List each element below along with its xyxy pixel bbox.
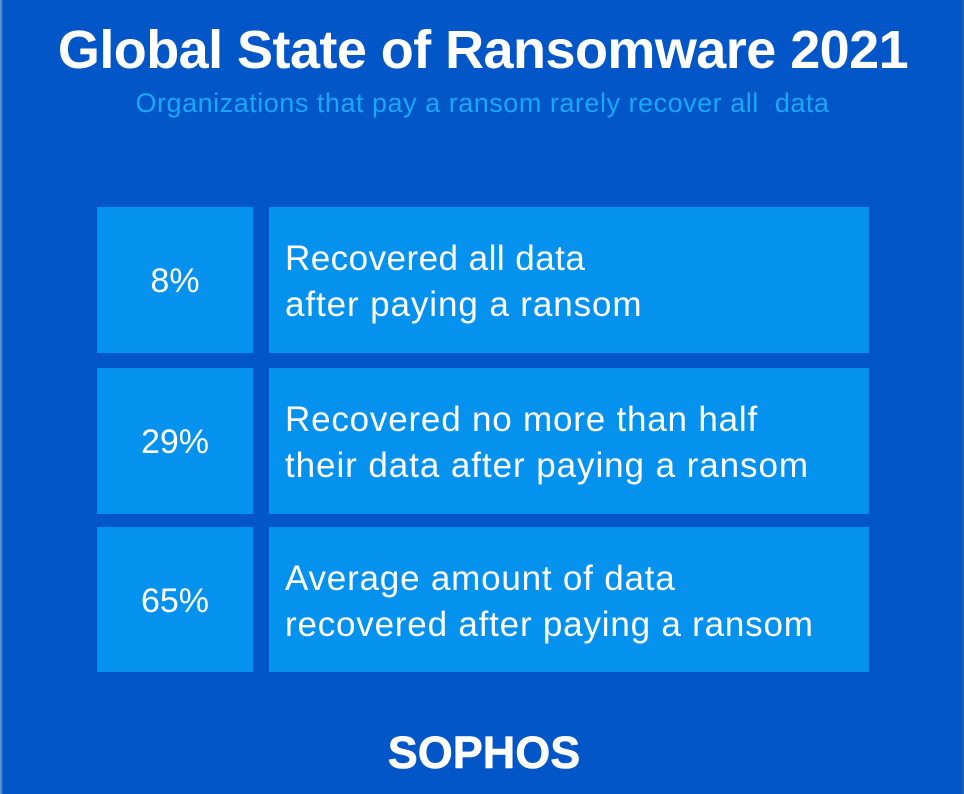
panel: row 1 (97, 207, 869, 353)
logo: Sophos: SOPHOS (388, 727, 580, 778)
stat: 65%: 65% (141, 582, 209, 620)
description: row 1: Recovered all data (285, 239, 585, 278)
right edge strip (962, 0, 964, 794)
description: row 1 (269, 207, 869, 353)
left edge strip (0, 0, 3, 794)
stat: 65% (97, 527, 253, 672)
stat: 29%: 29% (141, 423, 209, 461)
title: Global State of Ransomware 2021 (58, 20, 908, 80)
description: row 1: after paying a ransom (285, 285, 642, 324)
panel: row 3 (97, 527, 869, 672)
description: row 3: recovered after paying a ransom (285, 605, 814, 644)
subtitle: Organizations that pay a ransom rarely recover all data (136, 88, 829, 118)
description: row 2: their data after paying a ransom (285, 446, 809, 485)
stat: 8% (97, 207, 253, 353)
description: row 3 (269, 527, 869, 672)
stat: 8%: 8% (150, 262, 200, 300)
description: row 2 (269, 368, 869, 514)
stat: 29% (97, 368, 253, 514)
panel: row 2 (97, 368, 869, 514)
description: row 2: Recovered no more than half (285, 400, 758, 439)
description: row 3: Average amount of data (285, 559, 676, 598)
